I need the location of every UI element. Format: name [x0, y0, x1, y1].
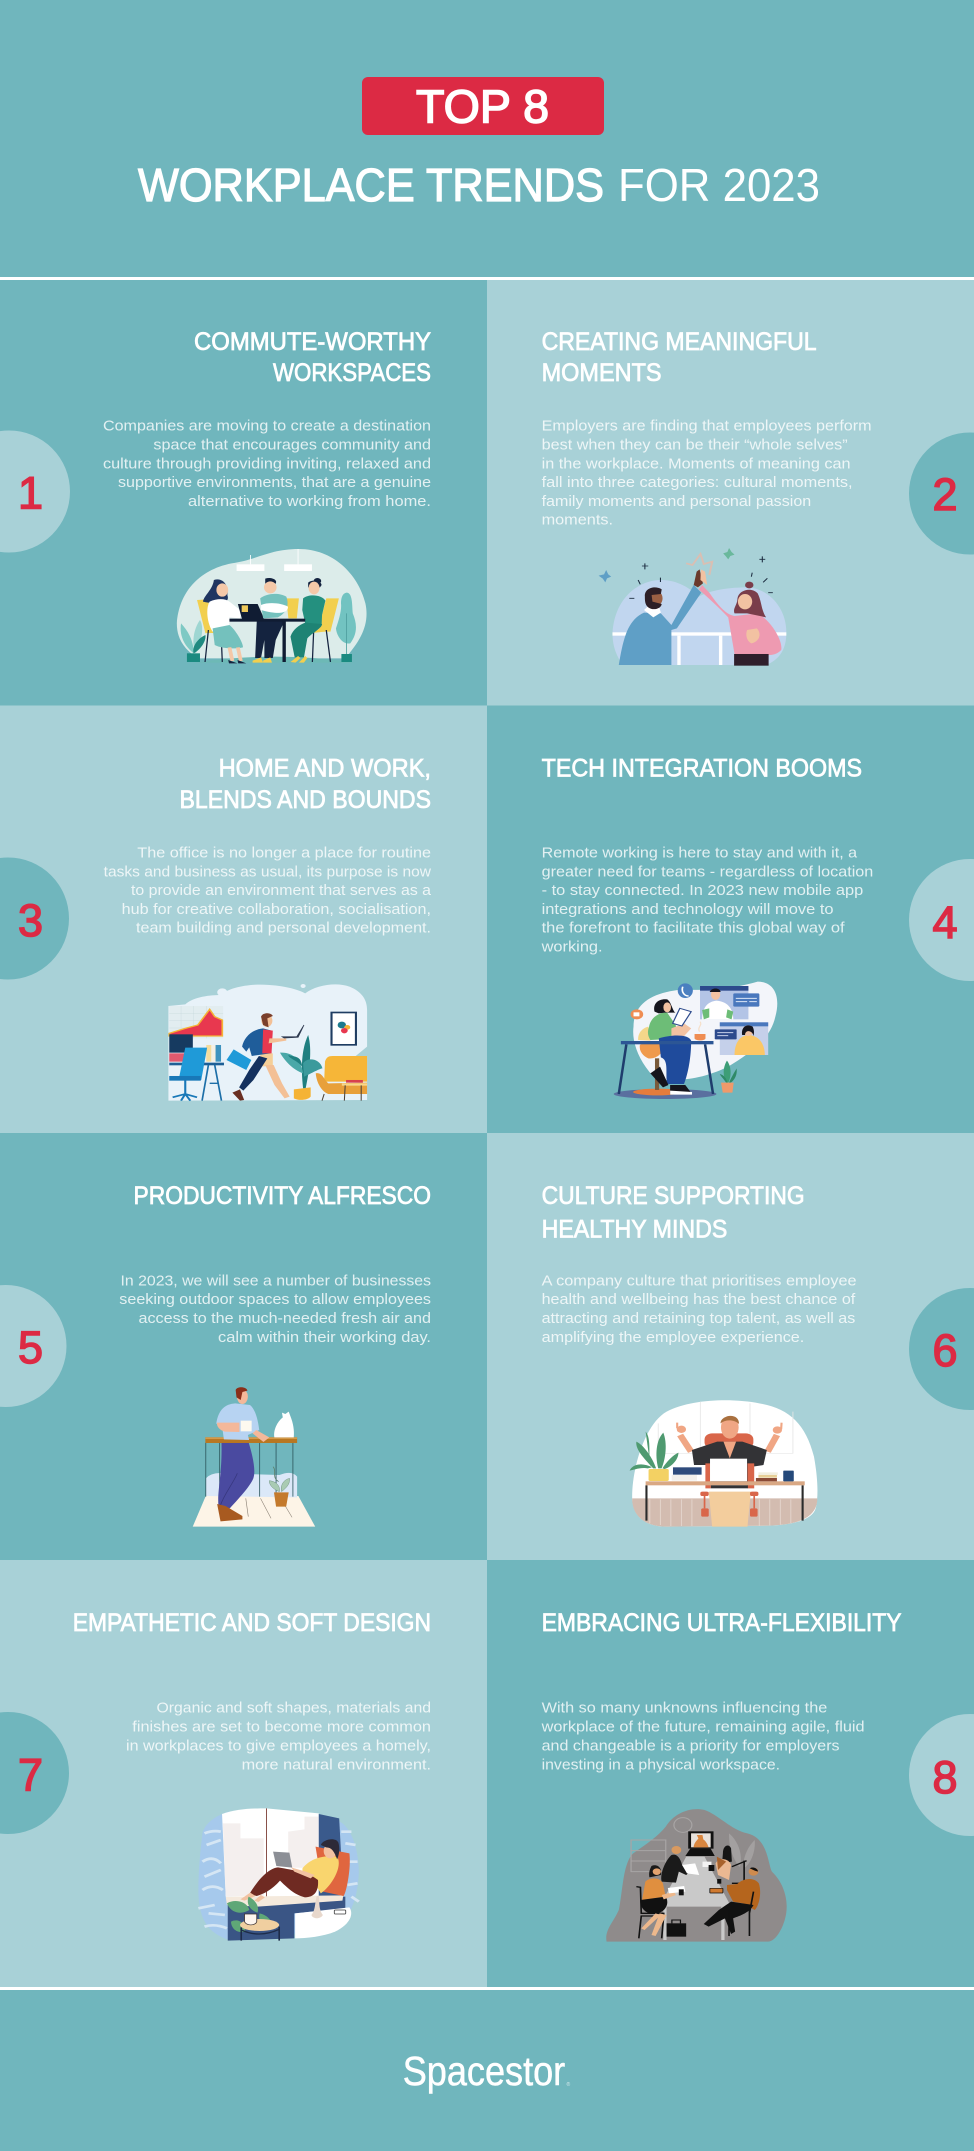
number badge 7: 7 [18, 1750, 43, 1801]
body text 1: culture through providing inviting, relaxed and [103, 455, 431, 472]
illustration: hybrid meeting [606, 1809, 787, 1942]
body text 2: moments. [542, 512, 613, 529]
number badge 8 [909, 1714, 974, 1836]
body text 4: integrations and technology will move to [542, 901, 834, 918]
body text 8: and changeable is a priority for employers [542, 1737, 840, 1754]
body text 3: The office is no longer a place for routine [137, 844, 431, 862]
body text 1: space that encourages community and [153, 436, 431, 454]
illustration: meditating at desk [630, 1400, 817, 1527]
body text 6: attracting and retaining top talent, as well as [542, 1310, 856, 1327]
heading 1: WORKSPACES [273, 359, 431, 387]
body text 3 [104, 844, 432, 937]
body text 7: Organic and soft shapes, materials and [156, 1700, 431, 1717]
illustration: colleagues high five [599, 548, 786, 666]
body text 4: greater need for teams - regardless of location [542, 863, 873, 880]
body text 6: A company culture that prioritises employee [542, 1272, 857, 1289]
body text 2: best when they can be their “whole selves” [542, 436, 848, 454]
title: FOR 2023 [618, 159, 820, 211]
body text 3: hub for creative collaboration, socialisation, [122, 901, 431, 918]
body text 6: amplifying the employee experience. [542, 1329, 804, 1346]
body text 3: to provide an environment that serves as a [131, 882, 432, 899]
body text 8: investing in a physical workspace. [542, 1756, 780, 1773]
number badge 4 [909, 859, 974, 981]
illustration: team at a cafe table [177, 549, 367, 663]
heading 3: HOME AND WORK, [219, 755, 431, 783]
number badge 2 [909, 432, 974, 554]
header [0, 0, 974, 277]
panel 5: productivity alfresco [0, 1133, 487, 1560]
panel 7: empathetic and soft design [0, 1560, 487, 1987]
badge: top 8: TOP 8 [416, 81, 549, 133]
body text 4: Remote working is here to stay and with it, a [542, 844, 858, 862]
heading 6: HEALTHY MINDS [542, 1216, 727, 1244]
body text 1: alternative to working from home. [188, 493, 431, 510]
number badge 2: 2 [932, 469, 958, 520]
panel 1: commute-worthy workspaces [0, 280, 487, 706]
heading 5: PRODUCTIVITY ALFRESCO [134, 1182, 431, 1210]
body text 3: team building and personal development. [136, 920, 431, 937]
number badge 1: 1 [18, 468, 43, 518]
body text 8 [541, 1700, 865, 1773]
illustration: woman relaxing on window seat [198, 1808, 359, 1941]
heading 1: COMMUTE-WORTHY [194, 328, 431, 356]
title: WORKPLACE TRENDS [138, 159, 604, 211]
body text 4 [541, 844, 873, 956]
number badge 7 [0, 1712, 69, 1834]
number badge 5: 5 [18, 1322, 43, 1373]
body text 7 [126, 1700, 431, 1773]
panel 4: tech integration booms [487, 706, 974, 1133]
body text 7: in workplaces to give employees a homely, [126, 1737, 431, 1754]
body text 4: the forefront to facilitate this global way of [542, 920, 845, 937]
heading 3 [180, 755, 431, 814]
number badge 6 [909, 1288, 974, 1410]
heading 1 [194, 328, 431, 387]
badge: top 8 [362, 77, 604, 135]
logo: Spacestor: ® [566, 2081, 570, 2088]
body text 3: tasks and business as usual, its purpose is now [104, 863, 431, 880]
number badge 3 [0, 858, 69, 980]
body text 5: seeking outdoor spaces to allow employees [119, 1291, 431, 1308]
footer [0, 1987, 974, 2151]
body text 5: In 2023, we will see a number of businesses [120, 1272, 431, 1289]
heading 2: MOMENTS [542, 359, 662, 387]
body text 5 [119, 1272, 431, 1346]
heading 6: CULTURE SUPPORTING [542, 1182, 805, 1210]
number badge 5 [0, 1285, 66, 1407]
number badge 8: 8 [932, 1752, 958, 1803]
body text 4: working. [541, 938, 603, 956]
illustration: man walking with laptop [168, 984, 367, 1101]
heading 2 [542, 328, 817, 387]
body text 1: Companies are moving to create a destination [103, 418, 431, 435]
body text 2 [542, 418, 872, 529]
logo: Spacestor: Spacestor [403, 2048, 565, 2094]
illustration: remote video call [614, 982, 777, 1099]
panel 8: embracing ultra-flexibility [487, 1560, 974, 1987]
body text 7: finishes are set to become more common [132, 1718, 431, 1736]
panel 2: creating meaningful moments [487, 280, 974, 706]
body text 2: Employers are finding that employees perform [542, 418, 872, 435]
number badge 3: 3 [18, 895, 43, 946]
body text 2: fall into three categories: cultural moments, [542, 474, 853, 491]
body text 7: more natural environment. [242, 1756, 431, 1773]
body text 6 [542, 1272, 857, 1346]
body text 1 [103, 418, 431, 510]
panel 6: culture supporting healthy minds [487, 1133, 974, 1560]
heading 2: CREATING MEANINGFUL [542, 328, 817, 356]
body text 4: - to stay connected. In 2023 new mobile app [542, 882, 863, 899]
body text 5: access to the much-needed fresh air and [138, 1310, 431, 1327]
body text 5: calm within their working day. [218, 1329, 431, 1346]
body text 2: family moments and personal passion [542, 493, 811, 510]
heading 4: TECH INTEGRATION BOOMS [542, 755, 862, 783]
heading 8: EMBRACING ULTRA-FLEXIBILITY [542, 1609, 902, 1637]
panel 3: home and work [0, 706, 487, 1133]
body text 6: health and wellbeing has the best chance of [542, 1291, 856, 1308]
number badge 4: 4 [932, 897, 958, 948]
number badge 6: 6 [932, 1325, 958, 1376]
number badge 1 [0, 430, 70, 552]
heading 3: BLENDS AND BOUNDS [180, 786, 431, 814]
illustration: man on balcony with cat [193, 1387, 315, 1527]
body text 8: With so many unknowns influencing the [542, 1700, 827, 1717]
body text 1: supportive environments, that are a genuine [118, 474, 431, 491]
body text 8: workplace of the future, remaining agile, fluid [541, 1718, 865, 1736]
heading 6 [542, 1182, 805, 1244]
body text 2: in the workplace. Moments of meaning can [542, 455, 851, 472]
heading 7: EMPATHETIC AND SOFT DESIGN [73, 1609, 431, 1637]
